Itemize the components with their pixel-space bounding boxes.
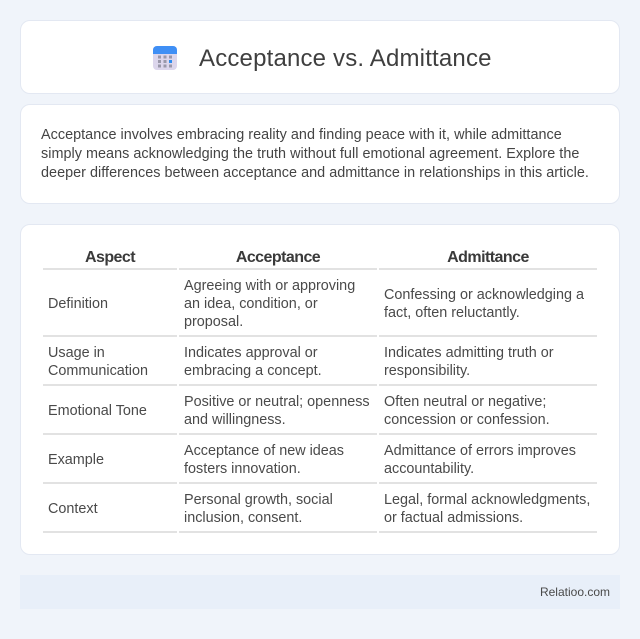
intro paragraph: simply means acknowledging the truth without full emotional agreement. Explore the (41, 146, 579, 162)
row: usage in communication: Indicates admitting truth or (384, 345, 554, 361)
row: usage in communication (48, 345, 554, 379)
row: usage in communication: Communication (48, 363, 148, 379)
row: definition (48, 278, 584, 330)
row: definition: proposal. (184, 314, 243, 330)
footer bar (20, 575, 620, 609)
row: definition: Agreeing with or approving (184, 278, 355, 294)
row: example: Example (48, 452, 104, 468)
title: Acceptance vs. Admittance (199, 45, 492, 72)
row: example: Acceptance of new ideas (184, 443, 344, 459)
column headers: Aspect (85, 249, 135, 266)
footer brand: Relatioo.com (540, 585, 610, 599)
row: emotional tone: Emotional Tone (48, 403, 147, 419)
row: example: fosters innovation. (184, 461, 301, 477)
row: example (48, 443, 576, 477)
row: definition: Definition (48, 296, 108, 312)
header card (20, 20, 620, 94)
row: usage in communication: embracing a concept. (184, 363, 322, 379)
row: context (48, 492, 590, 526)
row: example: accountability. (384, 461, 474, 477)
row: emotional tone: Positive or neutral; openness (184, 394, 370, 410)
row: definition: Confessing or acknowledging a (384, 287, 584, 303)
intro paragraph: Acceptance involves embracing reality and finding peace with it, while admittance (41, 127, 562, 143)
row: definition: an idea, condition, or (184, 296, 318, 312)
column headers (85, 249, 529, 266)
row: context: inclusion, consent. (184, 510, 302, 526)
row: context: Legal, formal acknowledgments, (384, 492, 590, 508)
row: usage in communication: Usage in (48, 345, 105, 361)
intro paragraph (41, 127, 589, 181)
column headers: Admittance (447, 249, 529, 266)
row: example: Admittance of errors improves (384, 443, 576, 459)
intro paragraph: deeper differences between acceptance and admittance in relationships in this article. (41, 165, 589, 181)
row: emotional tone: concession or confession. (384, 412, 550, 428)
row: usage in communication: responsibility. (384, 363, 470, 379)
row: usage in communication: Indicates approval or (184, 345, 318, 361)
row: context: or factual admissions. (384, 510, 523, 526)
icon: calendar (153, 46, 177, 70)
row: emotional tone (48, 394, 550, 428)
table card (20, 224, 620, 555)
row: context: Context (48, 501, 98, 517)
row: definition: fact, often reluctantly. (384, 305, 520, 321)
row: emotional tone: Often neutral or negative; (384, 394, 546, 410)
intro card (20, 104, 620, 204)
row: emotional tone: and willingness. (184, 412, 286, 428)
column headers: Acceptance (236, 249, 320, 266)
row: context: Personal growth, social (184, 492, 333, 508)
